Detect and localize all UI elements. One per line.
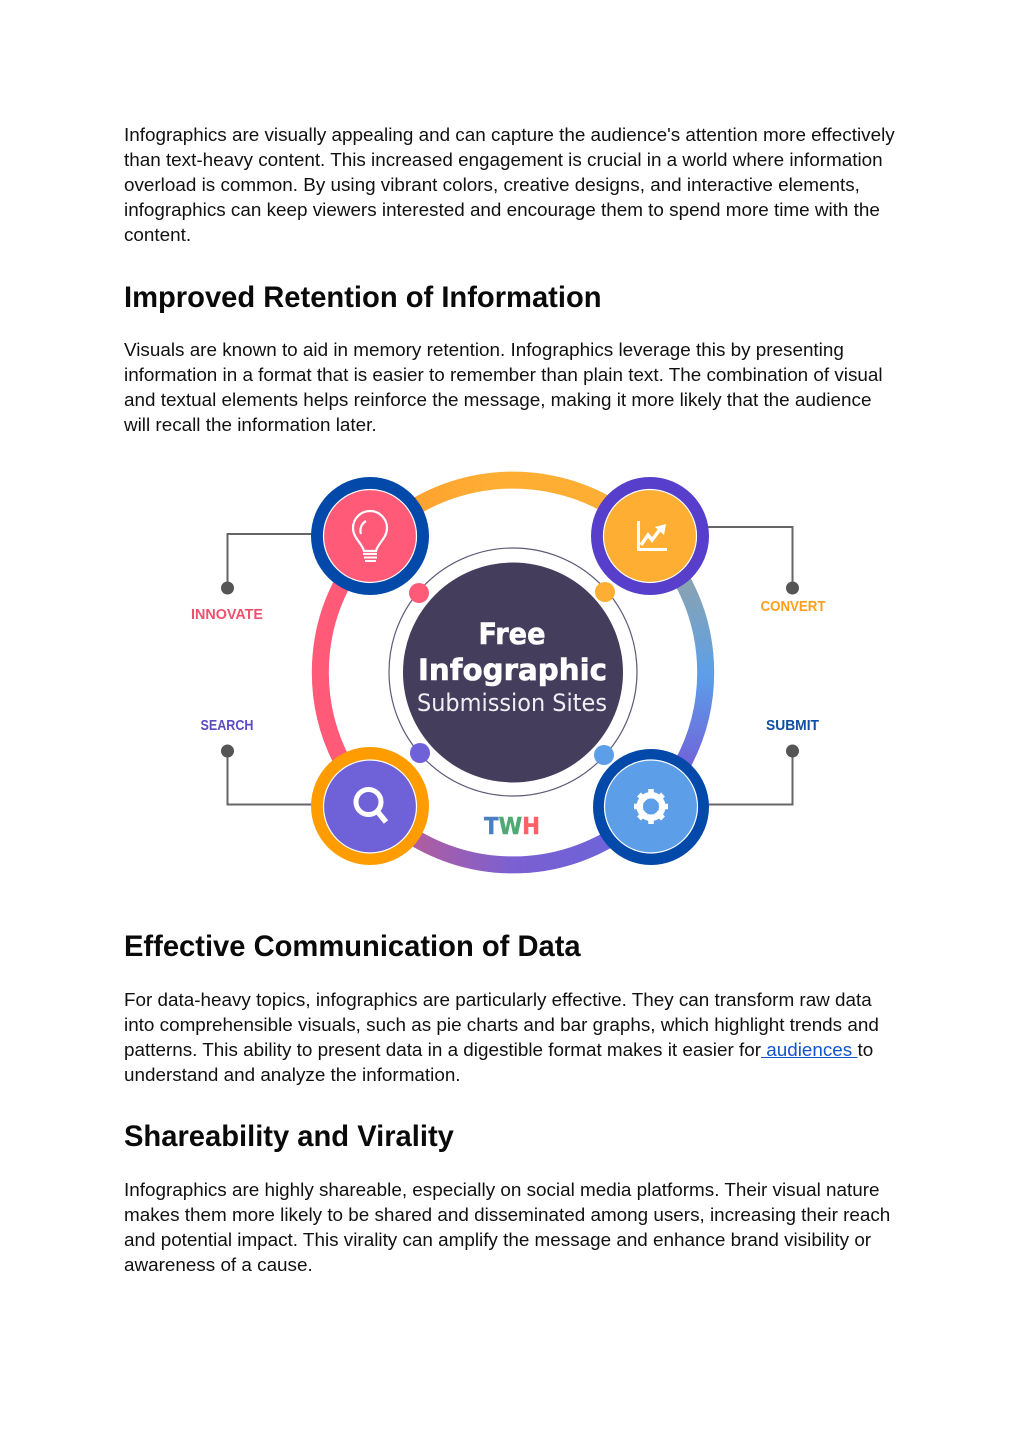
arc: right blue xyxy=(682,580,706,765)
TWH logo: TWH xyxy=(484,814,540,840)
arc: top orange xyxy=(401,480,625,516)
connector: submit xyxy=(707,751,792,804)
icon: magnifier xyxy=(356,790,386,822)
icon: gear xyxy=(634,789,668,824)
paragraph: data: understand and analyze the information. xyxy=(124,1064,461,1085)
center title: infographic: Infographic xyxy=(418,653,607,687)
intro paragraph xyxy=(124,124,895,245)
paragraph: retention: and textual elements helps reinforce the message, making it more likely that the audience xyxy=(124,389,871,410)
heading: effective communication: Effective Communication of Data xyxy=(124,931,581,963)
connector: innovate xyxy=(228,534,313,588)
paragraph: shareability: awareness of a cause. xyxy=(124,1254,313,1275)
heading: shareability: Shareability and Virality xyxy=(124,1121,454,1153)
connector dots xyxy=(221,582,799,758)
intro paragraph: infographics can keep viewers interested and encourage them to spend more time with the xyxy=(124,199,880,220)
intro paragraph: content. xyxy=(124,224,191,245)
node: search magnifier xyxy=(311,747,429,865)
node: innovate bulb xyxy=(311,477,429,595)
center subtitle: Submission Sites xyxy=(417,689,607,717)
label: innovate: INNOVATE xyxy=(191,607,263,623)
center disc xyxy=(403,562,623,782)
icon: light bulb xyxy=(353,511,387,561)
paragraph: data: into comprehensible visuals, such as pie charts and bar graphs, which highlight trends and xyxy=(124,1014,879,1035)
paragraph: shareability: and potential impact. This virality can amplify the message and enhance brand visibility or xyxy=(124,1229,871,1250)
thin ring xyxy=(389,548,637,796)
paragraph: data: patterns. This ability to present data in a digestible format makes it easier for audiences to xyxy=(124,1039,873,1060)
paragraph: retention: will recall the information later. xyxy=(124,414,377,435)
paragraph: shareability xyxy=(124,1179,890,1275)
heading: improved retention: Improved Retention of Information xyxy=(124,282,602,314)
connector: convert xyxy=(707,527,792,588)
connector: search xyxy=(228,751,313,804)
paragraph: shareability: Infographics are highly shareable, especially on social media platforms. Their visual nature xyxy=(124,1179,879,1200)
paragraph: retention: information in a format that is easier to remember than plain text. The combination of visual xyxy=(124,364,883,385)
paragraph: data: For data-heavy topics, infographics are particularly effective. They can transform raw data xyxy=(124,989,872,1010)
node: convert chart xyxy=(591,477,709,595)
small dots on ring xyxy=(409,582,615,765)
paragraph: data xyxy=(124,989,879,1085)
paragraph: retention: Visuals are known to aid in memory retention. Infographics leverage this by presenting xyxy=(124,339,844,360)
icon: growth chart xyxy=(638,521,667,550)
center title: free: Free xyxy=(478,617,546,651)
node: submit gear xyxy=(593,749,709,865)
arc: left pink xyxy=(320,580,344,765)
label: submit: SUBMIT xyxy=(766,718,819,734)
intro paragraph: Infographics are visually appealing and can capture the audience's attention more effectively xyxy=(124,124,895,145)
label: convert: CONVERT xyxy=(760,599,826,615)
intro paragraph: than text-heavy content. This increased engagement is crucial in a world where information xyxy=(124,149,883,170)
intro paragraph: overload is common. By using vibrant colors, creative designs, and interactive elements, xyxy=(124,174,860,195)
paragraph: retention xyxy=(124,339,883,435)
paragraph: shareability: makes them more likely to be shared and disseminated among users, increasing their reach xyxy=(124,1204,890,1225)
label: search: SEARCH xyxy=(200,718,254,734)
arc: bottom purple xyxy=(401,829,625,865)
